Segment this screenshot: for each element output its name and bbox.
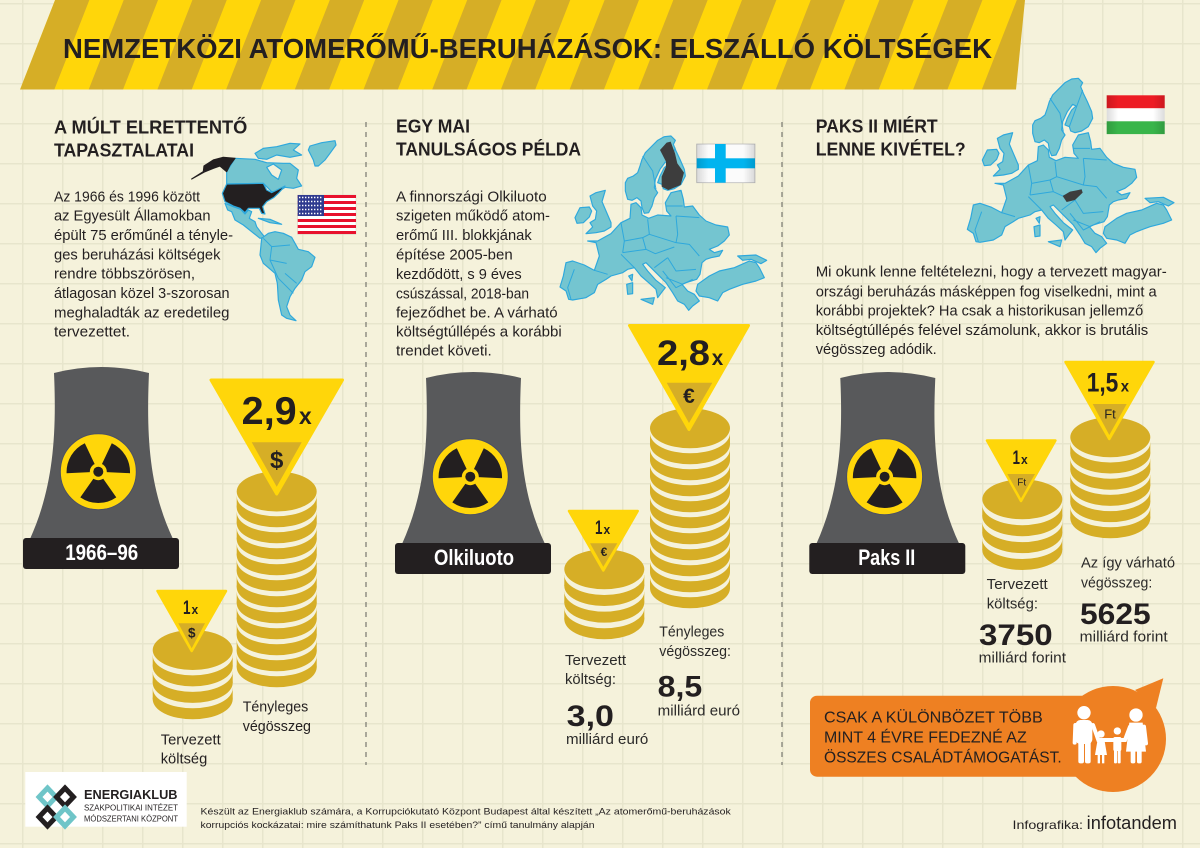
callout text: ÖSSZES CSALÁDTÁMOGATÁST. [824, 749, 1062, 767]
body text: rendre többszörösen, [54, 266, 195, 283]
label: expected 5625: milliárd forint [1080, 630, 1168, 646]
label: actual 8,5: milliárd euró [658, 704, 740, 720]
map: Americas [192, 141, 336, 321]
multiplier badge: 2,8x: 2,8 [657, 334, 710, 373]
multiplier badge: 1x [987, 440, 1055, 501]
callout text [824, 709, 1062, 767]
label: expected 5625: végösszeg: [1081, 574, 1152, 591]
logo mark [39, 788, 74, 826]
body text: meghaladták az eredetileg [54, 304, 230, 321]
heading: LENNE KIVÉTEL? [816, 139, 966, 160]
body text: Az 1966 és 1996 között [54, 189, 201, 206]
body text: épült 75 erőműnél a tényle- [54, 227, 233, 244]
body text: országi beruházás másképpen fog viselkedni, mint a [816, 284, 1157, 301]
label: planned 3750 [979, 576, 1066, 667]
credit: infotandem: infotandem [1087, 813, 1177, 833]
label: expected 5625: 5625 [1080, 598, 1151, 631]
label: planned 3,0: milliárd euró [566, 732, 648, 748]
multiplier badge: 1x: € [601, 545, 608, 559]
label: planned 3750: milliárd forint [979, 651, 1066, 667]
body text: az Egyesült Államokban [54, 208, 210, 225]
coin stack: planned [564, 549, 644, 639]
body text: átlagosan közel 3-szorosan [54, 285, 230, 302]
label: planned 3,0 [565, 652, 648, 748]
body text [54, 189, 233, 341]
logo text [84, 788, 178, 823]
label: planned 3,0: 3,0 [567, 700, 614, 733]
icon: family [1075, 706, 1146, 763]
multiplier badge: 1x [569, 511, 638, 570]
tower label: Olkiluoto [434, 545, 514, 570]
body text [816, 264, 1167, 358]
label: actual 8,5 [658, 624, 740, 720]
body text: szigeten működő atom- [396, 208, 550, 225]
label: planned 3750: költség: [987, 595, 1038, 612]
multiplier badge: 1,5x [1066, 362, 1154, 439]
multiplier badge: 1x: x [1021, 453, 1028, 467]
label: actual: Tényleges [243, 699, 308, 716]
label: planned [161, 731, 222, 767]
multiplier badge: 1x: x [192, 603, 198, 617]
multiplier badge: 2,9x: x [299, 403, 312, 429]
panel: Paks II [809, 78, 1175, 792]
tower label: 1966–96 [65, 540, 138, 565]
logo text: MÓDSZERTANI KÖZPONT [84, 814, 178, 823]
tower label: Paks II [858, 545, 915, 570]
body text: építése 2005-ben [396, 246, 513, 263]
label: actual 8,5: végösszeg: [659, 643, 731, 660]
label: expected 5625: Az így várható [1081, 554, 1175, 571]
credit: infotandem: Infografika: [1012, 818, 1083, 832]
multiplier badge: 1,5x: x [1121, 379, 1129, 396]
multiplier badge: 1x: x [604, 523, 610, 537]
label: planned 3750: Tervezett [987, 576, 1049, 593]
cooling tower: Olkiluoto [395, 372, 551, 574]
multiplier badge: 2,9x: 2,9 [242, 390, 297, 433]
heading: EGY MAI [396, 117, 470, 137]
heading [54, 116, 247, 161]
multiplier badge: 1x: $ [188, 625, 196, 640]
label: actual 8,5: Tényleges [659, 624, 724, 641]
body text: ges beruházási költségek [54, 246, 221, 263]
label: planned 3,0: Tervezett [565, 652, 627, 669]
body text: költségtúllépés felével számolunk, akkor is brutális [816, 322, 1148, 339]
map: Europe, Finland highlighted [560, 136, 767, 310]
panel: Olkiluoto [395, 117, 767, 748]
body text: kezdődött, s 9 éves [396, 266, 522, 283]
label: expected 5625 [1080, 554, 1175, 646]
body text: csúszással, 2018-ban [396, 285, 529, 302]
flag: Finland [697, 144, 755, 183]
credit: infotandem [1012, 813, 1177, 833]
body text: tervezettet. [54, 324, 130, 341]
cooling tower: 1966–96 [23, 367, 179, 569]
multiplier badge: 1x: 1 [183, 598, 191, 619]
multiplier badge: 1x: Ft [1017, 478, 1026, 489]
source note [200, 806, 731, 831]
label: planned 3750: 3750 [979, 619, 1053, 652]
body text: A finnországi Olkiluoto [396, 189, 547, 206]
multiplier badge: 1x [158, 591, 226, 651]
column dividers [366, 122, 782, 765]
title: NEMZETKÖZI ATOMERŐMŰ-BERUHÁZÁSOK: ELSZÁLLÓ KÖLTSÉGEK [63, 33, 992, 64]
panel: past [23, 116, 356, 767]
flag: Hungary [1107, 95, 1165, 134]
multiplier badge: 2,9x: $ [270, 447, 284, 474]
source note: korrupciós kockázatai: mire számíthatunk Paks II esetében?” című tanulmány alapján [200, 820, 594, 831]
map: Europe, Hungary highlighted [967, 78, 1174, 253]
body text: erőmű III. blokkjának [396, 227, 532, 244]
label: planned: költség [161, 750, 207, 767]
heading [816, 116, 966, 160]
heading: A MÚLT ELRETTENTŐ [54, 116, 247, 137]
multiplier badge: 1,5x: Ft [1104, 406, 1116, 421]
label: actual [243, 699, 311, 735]
coin stack: actual [650, 408, 730, 608]
multiplier badge: 2,8x: x [712, 347, 724, 370]
multiplier badge: 1x: 1 [1012, 448, 1020, 469]
body text: fejeződhet be. A várható [396, 304, 558, 321]
label: actual 8,5: 8,5 [658, 671, 702, 704]
multiplier badge: 1,5x: 1,5 [1087, 368, 1118, 398]
label: actual: végösszeg [243, 718, 311, 735]
coin stack: planned [982, 479, 1062, 570]
multiplier badge: 2,8x: € [683, 385, 695, 408]
body text: korábbi projektek? Ha csak a historikusan jellemző [816, 303, 1143, 320]
body text: végösszeg adódik. [816, 341, 937, 358]
callout text: MINT 4 ÉVRE FEDEZNÉ AZ [824, 730, 1027, 747]
label: planned: Tervezett [161, 731, 222, 748]
heading: TAPASZTALATAI [54, 141, 194, 161]
coin stack: planned [153, 630, 233, 719]
coin stack: expected [1070, 417, 1150, 538]
title banner [20, 0, 1025, 90]
label: planned 3,0: költség: [565, 671, 616, 688]
logo text: ENERGIAKLUB [84, 788, 178, 802]
heading: TANULSÁGOS PÉLDA [396, 139, 581, 160]
heading: PAKS II MIÉRT [816, 116, 938, 137]
logo: Energiaklub [25, 772, 187, 827]
multiplier badge: 2,8x [630, 326, 748, 430]
body text [396, 189, 562, 360]
flag: USA [298, 195, 356, 234]
coin stack: actual [237, 472, 317, 687]
multiplier badge: 1x: 1 [595, 518, 603, 539]
callout text: CSAK A KÜLÖNBÖZET TÖBB [824, 709, 1043, 727]
callout [810, 678, 1166, 792]
source note: Készült az Energiaklub számára, a Korrupciókutató Központ Budapest által készített „Az atomerőmű-beruházások [200, 806, 731, 817]
multiplier badge: 2,9x [211, 380, 342, 494]
heading [396, 117, 581, 160]
logo text: SZAKPOLITIKAI INTÉZET [84, 804, 178, 813]
body text: trendet követi. [396, 343, 492, 360]
body text: Mi okunk lenne feltételezni, hogy a tervezett magyar- [816, 264, 1167, 281]
body text: költségtúllépés a korábbi [396, 324, 562, 341]
cooling tower: Paks II [809, 372, 965, 574]
